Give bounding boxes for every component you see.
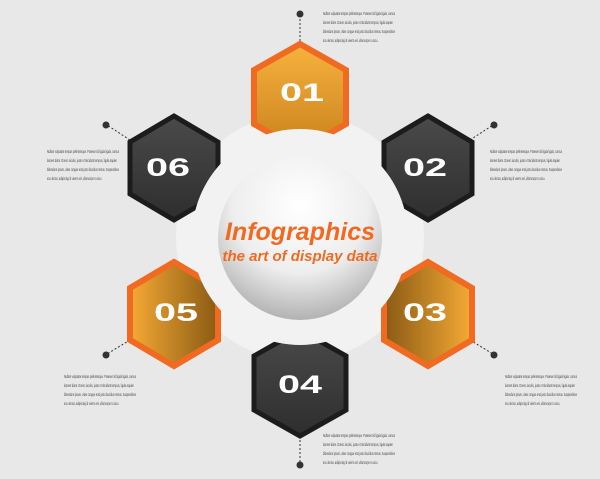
connector: 01 xyxy=(296,10,304,45)
text block 01: arcu lectus, adipiscing id viverra vel, ullamcorper a arcu. xyxy=(323,38,378,43)
title xyxy=(222,218,378,265)
connector: 06 xyxy=(102,122,130,140)
text block 06 xyxy=(47,149,119,181)
text block 04 xyxy=(323,433,395,465)
hexagon 04 xyxy=(254,330,346,436)
hexagon 05 xyxy=(130,262,218,366)
text block 05 xyxy=(64,374,136,406)
gear ring outer xyxy=(176,113,424,361)
text block 06: bibendum ipsum, vitae congue erat justo faucibus metus. Suspendisse xyxy=(47,167,119,172)
numbers xyxy=(146,79,447,399)
sphere xyxy=(218,156,382,320)
text block 05: arcu lectus, adipiscing id viverra vel, ullamcorper a arcu. xyxy=(64,401,119,406)
text block 06: Nullam vulputate tempus pellentesque. Praesent id ligula ligula, cursus xyxy=(47,149,119,154)
connector: 02 xyxy=(470,122,498,140)
hexagon 03 xyxy=(384,262,472,366)
numbers: 04 xyxy=(278,371,322,399)
text block 03 xyxy=(505,374,577,406)
text block 04: arcu lectus, adipiscing id viverra vel, ullamcorper a arcu. xyxy=(323,460,378,465)
text block 01: Nullam vulputate tempus pellentesque. Praesent id ligula ligula, cursus xyxy=(323,11,395,16)
title: the art of display data xyxy=(222,248,378,265)
text block 04: Nullam vulputate tempus pellentesque. Praesent id ligula ligula, cursus xyxy=(323,433,395,438)
text block 04: laoreet diam. Donec iaculis, justo et tincidunt tempus, ligula sapien xyxy=(323,442,393,447)
connector: 05 xyxy=(102,340,130,358)
text block 01: bibendum ipsum, vitae congue erat justo faucibus metus. Suspendisse xyxy=(323,29,395,34)
hexagon 02 xyxy=(384,116,472,220)
text block 02: arcu lectus, adipiscing id viverra vel, ullamcorper a arcu. xyxy=(490,176,545,181)
text block 05: laoreet diam. Donec iaculis, justo et tincidunt tempus, ligula sapien xyxy=(64,383,134,388)
numbers: 06 xyxy=(146,154,190,182)
numbers: 05 xyxy=(154,299,198,327)
hexagon 01 xyxy=(254,44,346,150)
text block 01 xyxy=(323,11,395,43)
text block 02 xyxy=(490,149,562,181)
text block 01: laoreet diam. Donec iaculis, justo et tincidunt tempus, ligula sapien xyxy=(323,20,393,25)
title: Infographics xyxy=(225,218,375,246)
hexagon 06 xyxy=(130,116,218,220)
text block 04: bibendum ipsum, vitae congue erat justo faucibus metus. Suspendisse xyxy=(323,451,395,456)
text block 06: arcu lectus, adipiscing id viverra vel, ullamcorper a arcu. xyxy=(47,176,102,181)
gear ring inner xyxy=(192,129,408,345)
numbers: 02 xyxy=(403,154,447,182)
connector: 04 xyxy=(296,436,304,468)
text block 06: laoreet diam. Donec iaculis, justo et tincidunt tempus, ligula sapien xyxy=(47,158,117,163)
numbers: 03 xyxy=(403,299,447,327)
numbers: 01 xyxy=(280,79,324,107)
connector: 03 xyxy=(470,340,498,358)
text block 05: Nullam vulputate tempus pellentesque. Praesent id ligula ligula, cursus xyxy=(64,374,136,379)
text block 05: bibendum ipsum, vitae congue erat justo faucibus metus. Suspendisse xyxy=(64,392,136,397)
